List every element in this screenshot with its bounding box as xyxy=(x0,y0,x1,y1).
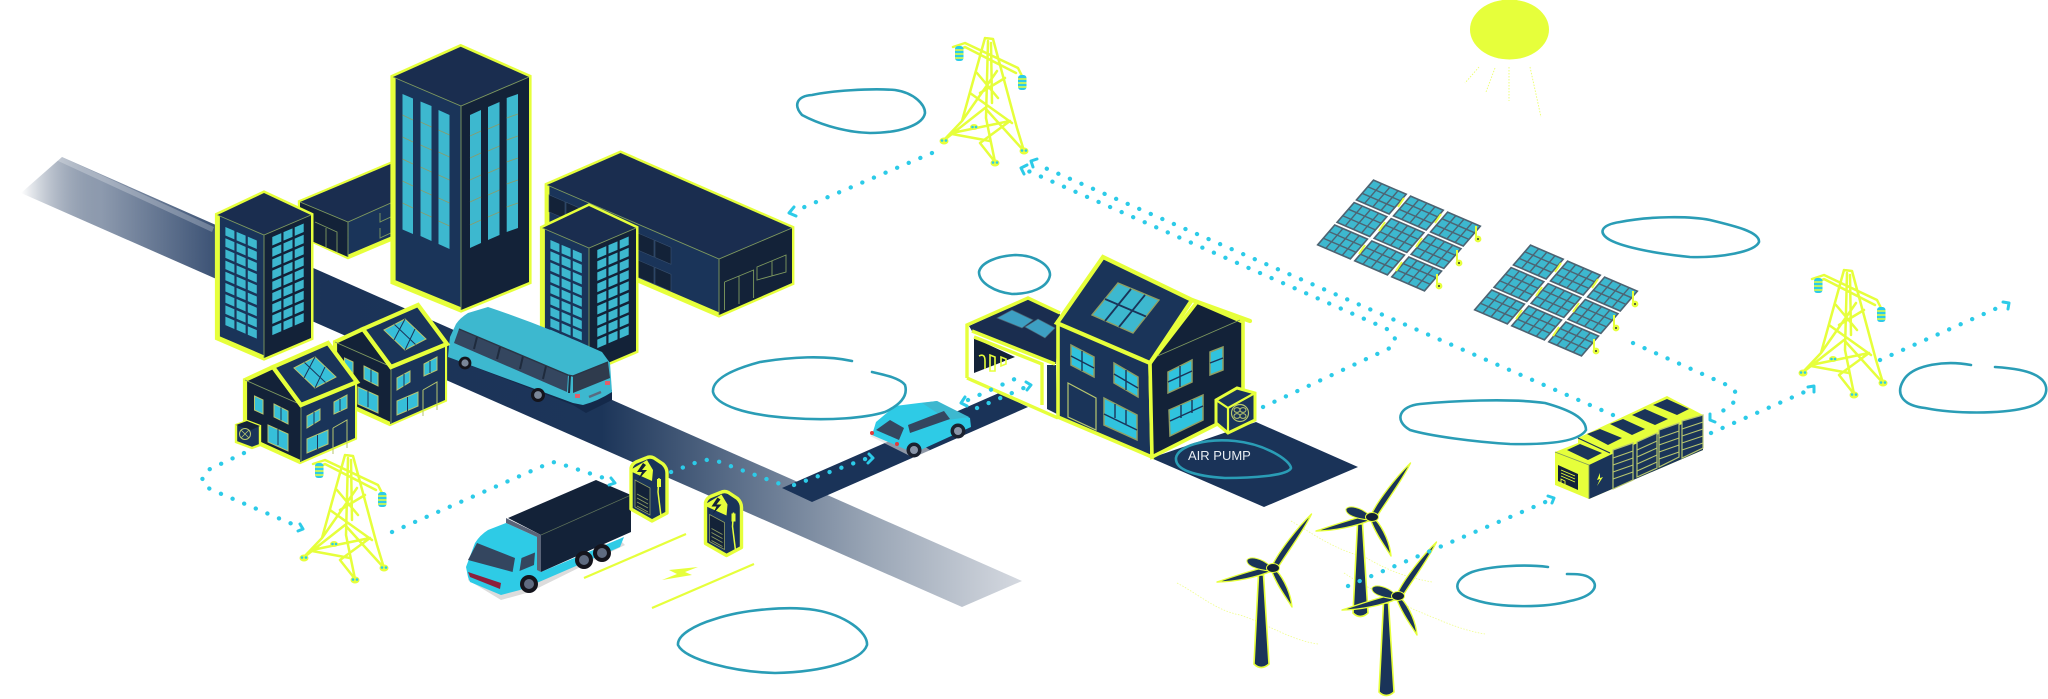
sketched callout outline 2 xyxy=(979,255,1050,294)
gable wall xyxy=(1150,302,1243,457)
charging bay lines and bolt xyxy=(584,534,754,608)
wind turbine front xyxy=(1342,542,1436,696)
truck xyxy=(466,480,631,600)
house back xyxy=(335,305,447,424)
charging station 1 xyxy=(631,457,667,521)
sketched callout outline 8 xyxy=(1900,363,2046,412)
fan unit xyxy=(1216,388,1255,433)
carport xyxy=(967,298,1060,418)
house front xyxy=(245,343,357,462)
sketched callout outline 1 xyxy=(797,89,925,133)
sketched callout outline 4 air pump xyxy=(1176,440,1291,478)
solar array south xyxy=(1475,245,1638,356)
tall tower centre xyxy=(393,47,529,310)
sketched callout outline 6 xyxy=(1603,217,1759,257)
office tower left xyxy=(217,193,311,358)
roof xyxy=(1057,257,1192,363)
battery storage unit xyxy=(1555,396,1703,499)
pylon south-west xyxy=(300,455,388,584)
wind ripples xyxy=(1177,521,1485,644)
ridge overhang xyxy=(1192,300,1250,321)
road with faded ends xyxy=(21,157,1022,607)
small heat pump unit xyxy=(236,421,260,448)
roof window xyxy=(1092,283,1159,333)
sun rays xyxy=(1465,67,1541,117)
driveway xyxy=(782,393,1028,502)
wide building right of tower xyxy=(547,153,792,315)
wall windows xyxy=(1071,345,1223,440)
wind turbine left xyxy=(1217,514,1312,668)
air pump pad xyxy=(1151,422,1358,507)
sun xyxy=(1470,0,1549,60)
sketched callout outline 9 xyxy=(1457,566,1595,606)
sketched callout outline 5 xyxy=(678,608,867,673)
door xyxy=(1068,383,1096,430)
office tower right xyxy=(542,206,636,371)
sketched callout outline 7 xyxy=(1400,400,1586,444)
energy flow dotted lines xyxy=(202,153,2009,586)
low building behind tall tower xyxy=(300,163,393,257)
solar array north xyxy=(1318,180,1481,291)
car xyxy=(870,401,971,458)
gable line xyxy=(1153,320,1240,358)
bus xyxy=(448,307,612,413)
wind turbine back xyxy=(1316,463,1410,616)
charging station 2 xyxy=(706,492,742,556)
front wall xyxy=(1058,323,1152,457)
main house with carport xyxy=(967,257,1255,457)
sketched callout outline 3 xyxy=(713,357,906,419)
label: air pump: AIR PUMP xyxy=(1188,448,1251,463)
pylon north xyxy=(940,38,1028,166)
pylon east xyxy=(1798,270,1888,398)
